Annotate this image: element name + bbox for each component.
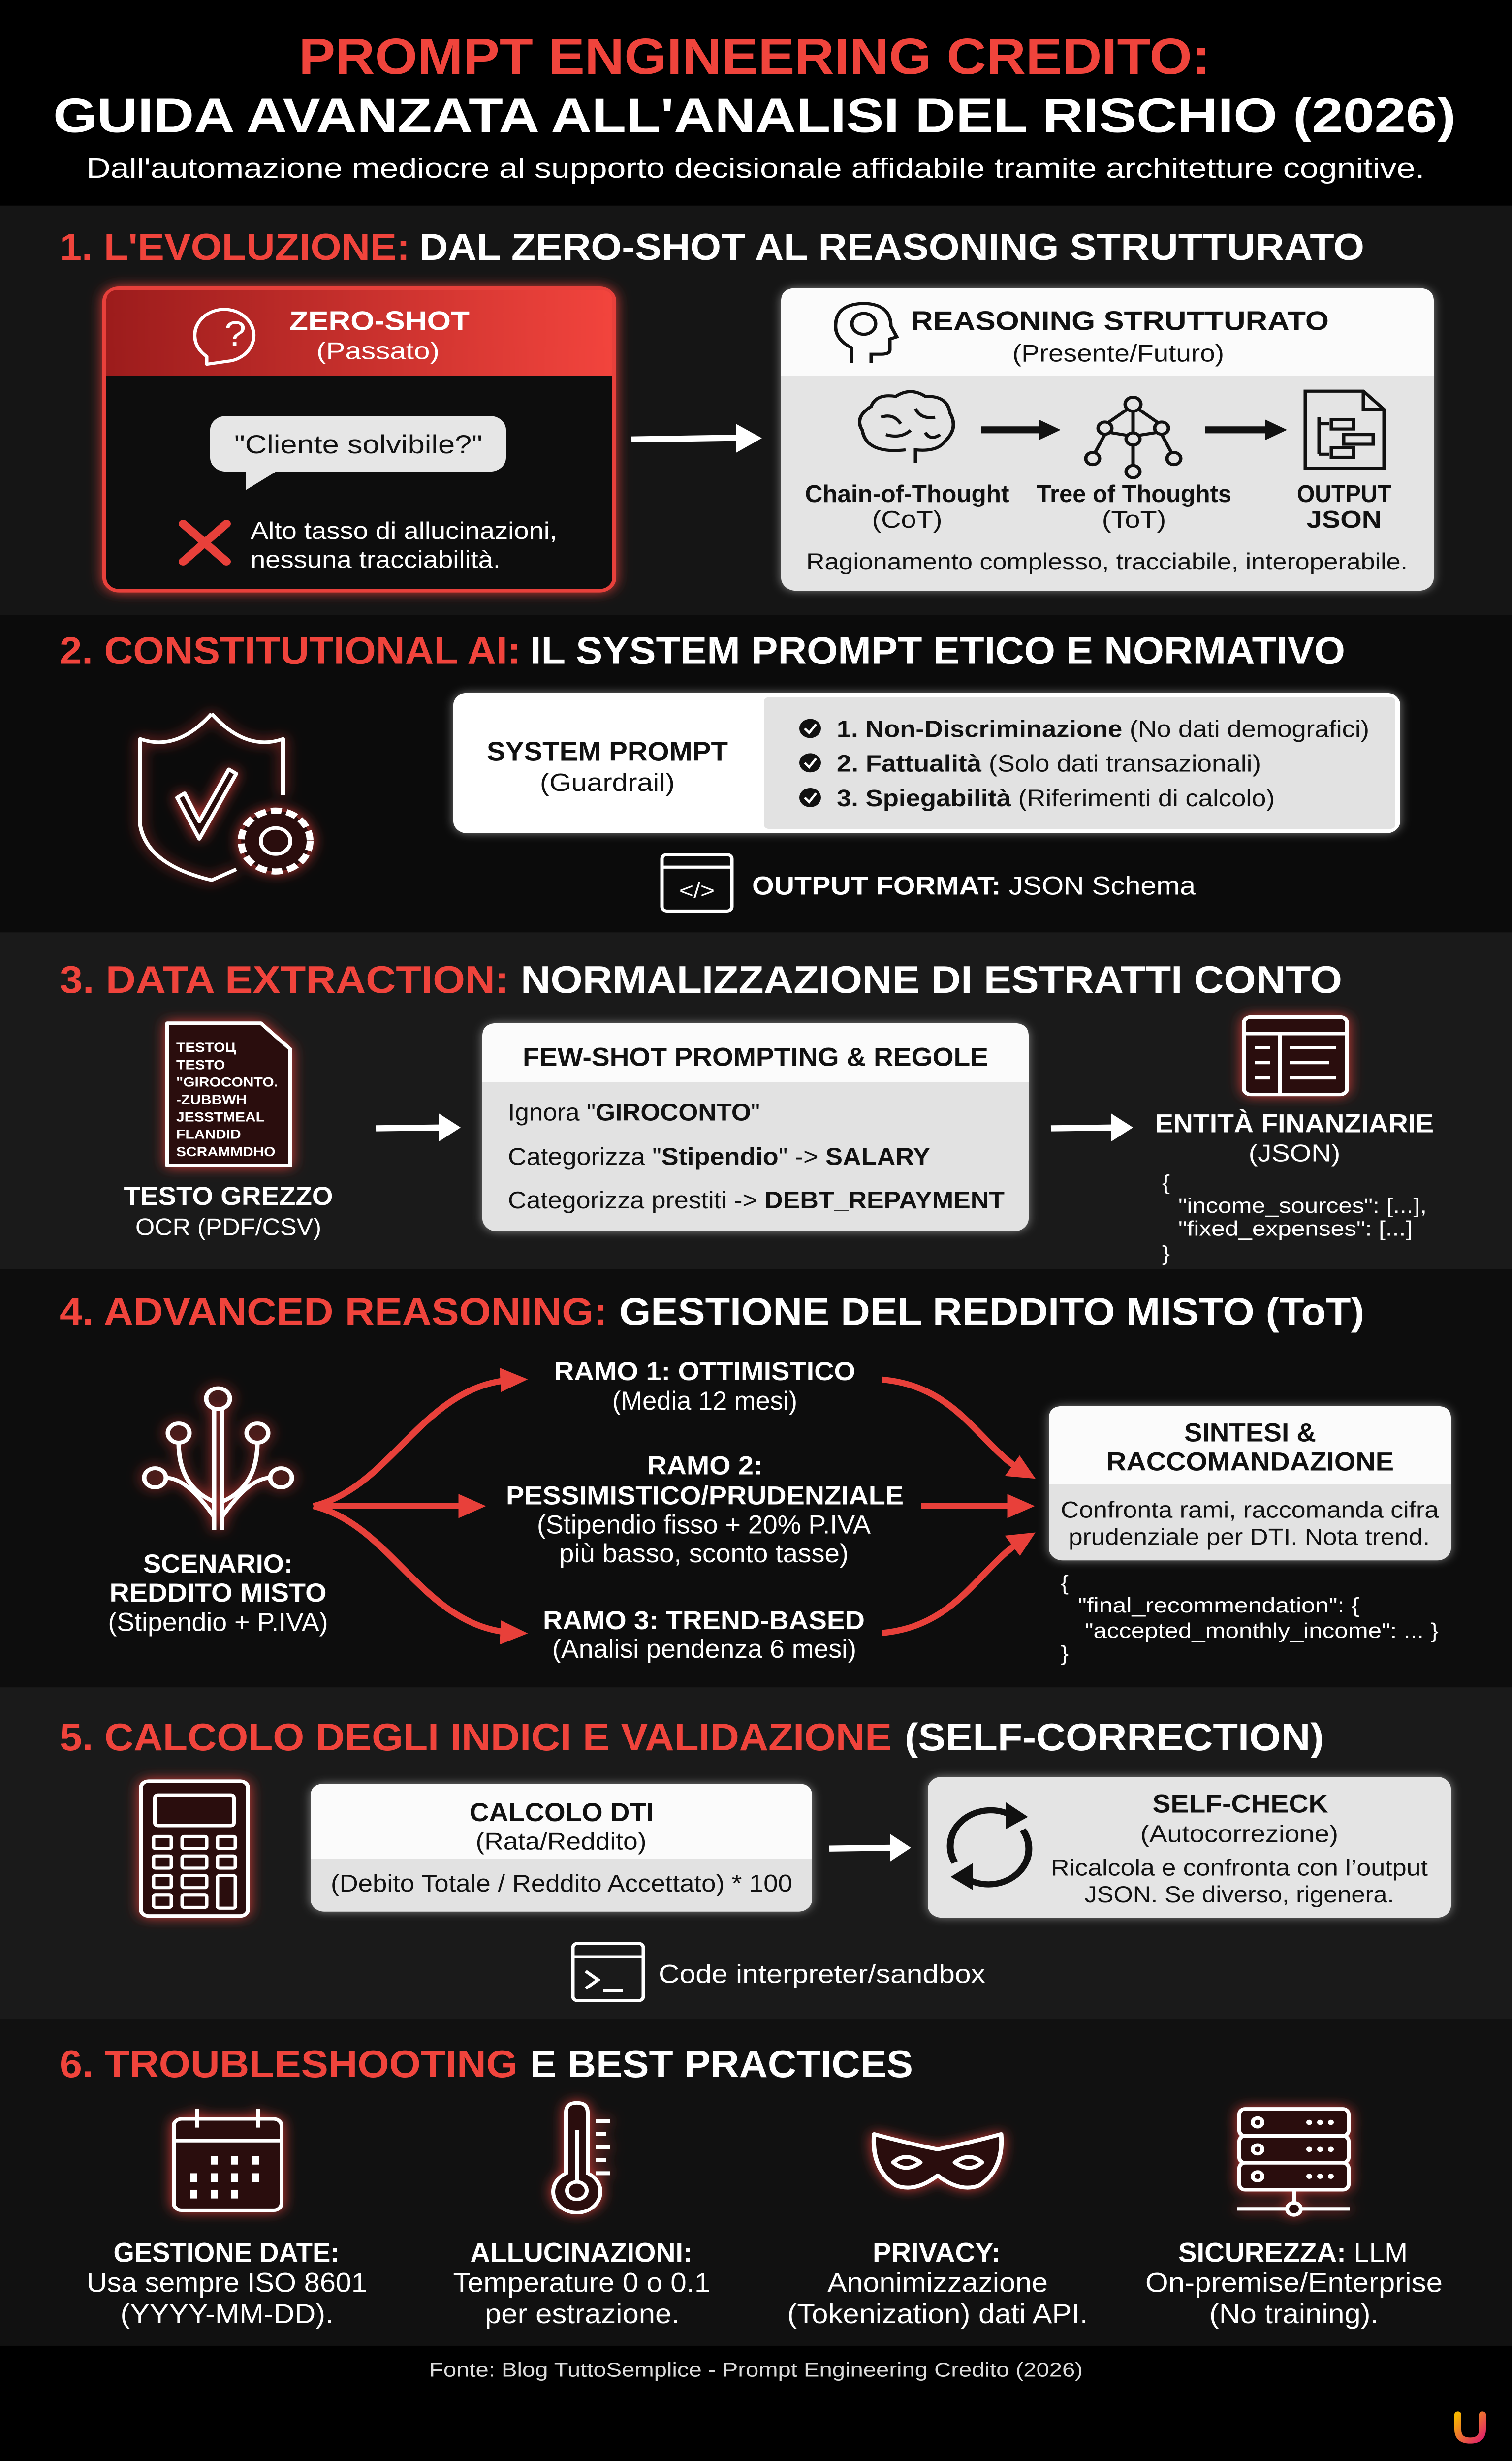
panel: few-shot prompting: FEW-SHOT PROMPTING & REGOLE [523, 1042, 988, 1072]
scenario: mixed income: (Stipendio + P.IVA) [108, 1608, 328, 1637]
financial entities output: ENTITÀ FINANZIARIE [1155, 1109, 1434, 1138]
code interpreter [573, 1943, 985, 2001]
icon: tree [1086, 397, 1181, 478]
branch texts [506, 1357, 904, 1663]
checklist: 1. Non-Discriminazione (No dati demografici) [837, 716, 1369, 742]
branch texts: (Media 12 mesi) [612, 1386, 797, 1415]
best practice: hallucinations: Temperature 0 o 0.1 [453, 2267, 711, 2298]
icon: code window: </> [679, 878, 715, 903]
checklist [799, 716, 1369, 811]
section 1 heading [60, 227, 1364, 268]
best practice: security: (No training). [1209, 2299, 1379, 2329]
zero-shot title: ZERO-SHOT [289, 306, 470, 336]
icon: calculator [141, 1781, 248, 1916]
arrow [981, 419, 1061, 441]
icon: branching tree [144, 1388, 292, 1530]
panel: DTI calculation [311, 1784, 812, 1912]
branch texts: (Analisi pendenza 6 mesi) [552, 1634, 856, 1663]
header [53, 28, 1456, 184]
section 5 heading: 5. CALCOLO DEGLI INDICI E VALIDAZIONE [60, 1716, 892, 1759]
section 6 heading: 6. TROUBLESHOOTING [60, 2043, 518, 2085]
financial entities output [1155, 1017, 1434, 1265]
icon: shield with gear [140, 714, 310, 880]
panel: self-check: (Autocorrezione) [1140, 1820, 1338, 1848]
best practice: hallucinations [453, 2103, 711, 2329]
panel: reasoning strutturato: Ragionamento complesso, tracciabile, interoperabile. [806, 548, 1408, 574]
financial entities output: "fixed_expenses": [...] [1178, 1217, 1413, 1240]
icon: thermometer [553, 2103, 610, 2212]
panel: zero-shot: (Passato) [316, 337, 440, 365]
best practice: dates: Usa sempre ISO 8601 [87, 2267, 367, 2298]
best practice: privacy: Anonimizzazione [827, 2267, 1048, 2298]
scenario: mixed income: SCENARIO: [143, 1549, 293, 1578]
arrow [1051, 1113, 1133, 1141]
panel: synthesis: Confronta rami, raccomanda cifra [1061, 1497, 1439, 1523]
icon: table [1244, 1017, 1347, 1095]
icon: garbled document: TESTO [176, 1057, 225, 1072]
icon: garbled document: SCRAMMDHO [176, 1144, 276, 1159]
labels: (CoT) [872, 506, 943, 533]
icon: calendar [174, 2109, 282, 2210]
icon: garbled document: JESSTMEAL [176, 1109, 265, 1124]
best practice: hallucinations: per estrazione. [485, 2299, 680, 2329]
icon: garbled document: TESTOЦ [176, 1040, 236, 1055]
icon: garbled document [167, 1023, 290, 1166]
panel: self-check: JSON. Se diverso, rigenera. [1085, 1881, 1394, 1908]
section 1 heading: 1. L'EVOLUZIONE: [60, 227, 410, 268]
speech bubble [210, 416, 506, 490]
best practice: hallucinations: ALLUCINAZIONI: [471, 2237, 693, 2268]
raw text document [124, 1023, 333, 1241]
zero-shot caption: Alto tasso di allucinazioni, [251, 517, 557, 544]
financial entities output: } [1162, 1242, 1170, 1265]
subtitle: Dall'automazione mediocre al supporto decisionale affidabile tramite architetture cognitive. [86, 153, 1425, 184]
system prompt label: SYSTEM PROMPT [487, 737, 728, 767]
section 2 heading: IL SYSTEM PROMPT ETICO E NORMATIVO [530, 629, 1345, 672]
section 3 heading: NORMALIZZAZIONE DI ESTRATTI CONTO [521, 958, 1342, 1001]
best practice: privacy: PRIVACY: [873, 2237, 1001, 2268]
panel: reasoning strutturato [781, 288, 1434, 591]
labels [805, 480, 1391, 533]
financial entities output: (JSON) [1249, 1140, 1340, 1167]
json recommendation [1061, 1571, 1439, 1665]
arrow [376, 1113, 461, 1141]
section 4 heading [60, 1290, 1364, 1333]
scenario: mixed income [108, 1388, 328, 1637]
speech bubble: "Cliente solvibile?" [234, 430, 482, 459]
panel: few-shot prompting [482, 1023, 1029, 1231]
panel: reasoning strutturato: REASONING STRUTTURATO [911, 306, 1329, 336]
panel: synthesis [1049, 1406, 1451, 1560]
icon: garbled document: -ZUBBWH [176, 1092, 247, 1107]
icon: server [1237, 2109, 1350, 2215]
best practice: dates: GESTIONE DATE: [113, 2237, 339, 2268]
raw text document: TESTO GREZZO [124, 1181, 333, 1210]
title line 1: PROMPT ENGINEERING CREDITO: [299, 28, 1210, 85]
labels: (ToT) [1102, 506, 1166, 533]
panel: self-check: Ricalcola e confronta con l’output [1051, 1854, 1428, 1881]
logo [1458, 2415, 1482, 2440]
section 2 heading: 2. CONSTITUTIONAL AI: [60, 629, 521, 672]
icon: refresh [950, 1804, 1029, 1889]
best practice: security: On-premise/Enterprise [1145, 2267, 1443, 2298]
panel: DTI calculation: (Debito Totale / Reddito Accettato) * 100 [331, 1870, 792, 1897]
icon: code window [662, 854, 732, 911]
icon: garbled document: "GIROCONTO. [176, 1074, 278, 1089]
icon: brain [859, 392, 953, 463]
labels: OUTPUT [1297, 480, 1391, 507]
arrow [1205, 419, 1287, 441]
panel: system prompt [453, 693, 1400, 833]
section 4 heading: GESTIONE DEL REDDITO MISTO (ToT) [619, 1290, 1364, 1333]
panel: synthesis: RACCOMANDAZIONE [1106, 1447, 1394, 1476]
icon: mask [874, 2134, 1002, 2188]
icon: terminal [573, 1943, 643, 2001]
scenario: mixed income: REDDITO MISTO [110, 1578, 327, 1607]
section 1 heading: DAL ZERO-SHOT AL REASONING STRUTTURATO [419, 227, 1364, 268]
arrow: zero-shot to reasoning [631, 424, 762, 453]
panel: self-check: SELF-CHECK [1153, 1789, 1328, 1818]
checklist: 3. Spiegabilità (Riferimenti di calcolo) [837, 785, 1275, 811]
best practice: privacy [788, 2134, 1088, 2329]
json recommendation: } [1061, 1641, 1069, 1665]
icon: head [836, 303, 897, 363]
best practice: privacy: (Tokenization) dati API. [788, 2299, 1088, 2329]
arrow [829, 1834, 911, 1862]
code interpreter: Code interpreter/sandbox [659, 1959, 985, 1988]
financial entities output: "income_sources": [...], [1178, 1194, 1427, 1217]
panel: self-check [928, 1777, 1451, 1918]
title line 2: GUIDA AVANZATA ALL'ANALISI DEL RISCHIO (2026) [53, 89, 1456, 143]
branch texts: RAMO 2: [647, 1451, 762, 1480]
labels: Tree of Thoughts [1037, 480, 1231, 507]
icon: question bubble: ? [224, 314, 246, 353]
best practice: dates: (YYYY-MM-DD). [120, 2299, 334, 2329]
panel: system prompt: (Guardrail) [540, 768, 675, 796]
icon: question bubble [195, 310, 254, 364]
panel: DTI calculation: (Rata/Reddito) [476, 1828, 647, 1855]
raw text document: OCR (PDF/CSV) [135, 1214, 321, 1241]
output format: OUTPUT FORMAT: JSON Schema [752, 871, 1196, 900]
section 2 heading [60, 629, 1345, 672]
arrows: branches [314, 1380, 1026, 1633]
branch texts: (Stipendio fisso + 20% P.IVA [537, 1510, 871, 1539]
panel: synthesis: SINTESI & [1184, 1418, 1316, 1447]
panel: synthesis: prudenziale per DTI. Nota trend. [1069, 1523, 1430, 1550]
panel: zero-shot [104, 288, 614, 591]
section 6 heading: E BEST PRACTICES [530, 2043, 913, 2085]
section 4 heading: 4. ADVANCED REASONING: [60, 1290, 607, 1333]
branch texts: PESSIMISTICO/PRUDENZIALE [506, 1481, 904, 1510]
panel: reasoning strutturato: (Presente/Futuro) [1012, 340, 1224, 367]
json recommendation: "final_recommendation": { [1078, 1594, 1359, 1617]
checklist: 2. Fattualità (Solo dati transazionali) [837, 750, 1261, 777]
best practice: dates [87, 2109, 367, 2329]
labels: JSON [1307, 506, 1382, 533]
panel: few-shot prompting: Ignora "GIROCONTO" [508, 1099, 760, 1126]
financial entities output: { [1162, 1171, 1170, 1194]
panel: few-shot prompting: Categorizza prestiti -> DEBT_REPAYMENT [508, 1187, 1005, 1214]
branch texts: RAMO 1: OTTIMISTICO [554, 1357, 855, 1386]
icon: json document [1305, 391, 1384, 469]
footer source: Fonte: Blog TuttoSemplice - Prompt Engineering Credito (2026) [429, 2359, 1083, 2381]
output format [662, 854, 1196, 911]
section 5 heading: (SELF-CORRECTION) [905, 1716, 1324, 1759]
icon: garbled document: FLANDID [176, 1127, 241, 1141]
zero-shot caption [251, 517, 557, 573]
section 3 heading: 3. DATA EXTRACTION: [60, 958, 509, 1001]
panel: DTI calculation: CALCOLO DTI [470, 1798, 654, 1827]
best practice: security: SICUREZZA: LLM [1178, 2237, 1408, 2268]
panel: few-shot prompting: Categorizza "Stipendio" -> SALARY [508, 1143, 930, 1170]
section 3 heading [60, 958, 1342, 1001]
section 6 heading [60, 2043, 913, 2085]
labels: Chain-of-Thought [805, 480, 1009, 507]
zero-shot caption: nessuna tracciabilità. [251, 546, 501, 573]
icon: red X [183, 524, 226, 562]
branch texts: più basso, sconto tasse) [559, 1539, 849, 1568]
json recommendation: { [1061, 1571, 1069, 1595]
json recommendation: "accepted_monthly_income": ... } [1085, 1619, 1439, 1642]
branch texts: RAMO 3: TREND-BASED [543, 1606, 865, 1635]
best practice: security [1145, 2109, 1443, 2329]
